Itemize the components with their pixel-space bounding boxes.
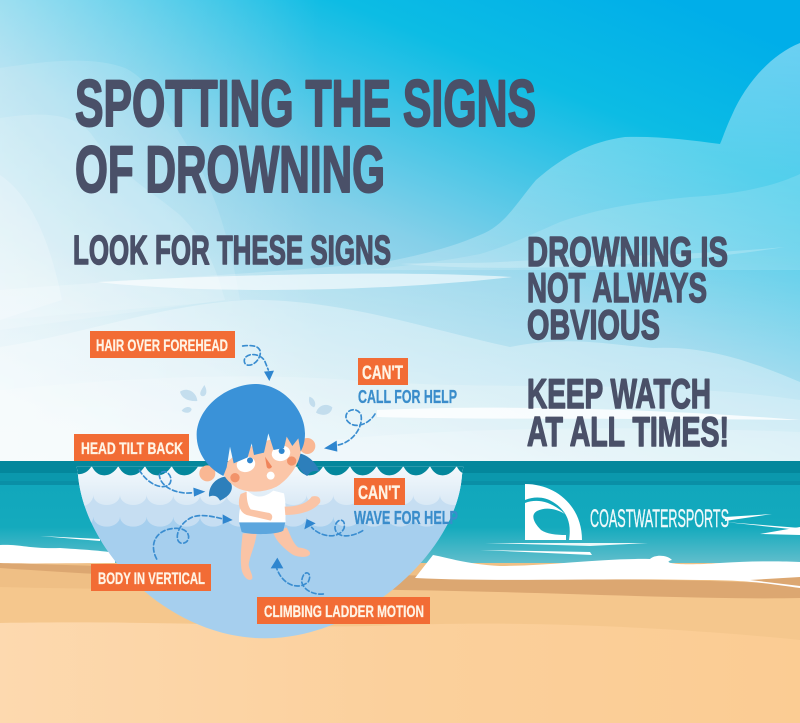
label: body in vertical: BODY IN VERTICAL [98,569,205,588]
icon: wave logo [525,484,582,540]
label: climbing ladder motion [257,597,430,624]
message: drowning is not always obvious: NOT ALWAYS [527,264,707,311]
sea [0,461,800,571]
clouds [0,43,800,470]
nose and mouth [265,457,275,480]
label: hair over forehead: HAIR OVER FOREHEAD [96,336,228,355]
cheeks [230,456,296,482]
label: climbing ladder motion: CLIMBING LADDER MOTION [264,602,424,621]
arrow: call for help [324,410,375,452]
arrow: head tilt back [139,470,205,497]
message: drowning is not always obvious: OBVIOUS [527,301,660,348]
water bowl [60,462,467,640]
label: can't call for help: CALL FOR HELP [358,387,457,407]
sand patch on foam [750,577,800,586]
logo: coastwatersports [525,484,729,540]
label: head tilt back: HEAD TILT BACK [81,439,184,458]
message: keep watch: KEEP WATCH [527,370,711,417]
sky background [0,0,800,470]
message: keep watch [527,370,729,455]
label: head tilt back [74,434,189,461]
shorts [239,522,285,534]
eyes [235,444,292,474]
water splashes [180,385,332,415]
label: can't wave for help: CAN'T [358,483,400,504]
shirt [239,491,286,522]
hair [197,384,305,476]
arms [239,492,320,521]
arrow: hair over forehead [243,346,274,381]
beach sand [0,563,800,723]
subheading: look for these signs: LOOK FOR THESE SIGNS [73,227,391,273]
legs [241,527,310,580]
sea foam [0,514,800,588]
label: can't wave for help [354,478,458,528]
arrow: wave for help [304,519,363,536]
label: can't call for help [358,358,457,407]
title: SPOTTING THE SIGNS [75,66,536,140]
pigtails [209,453,319,501]
title: OF DROWNING [75,132,385,206]
arrow: climbing ladder motion [271,558,323,594]
ears [199,438,315,481]
label: can't call for help: CAN'T [362,363,403,384]
arrow: body in vertical [153,514,233,559]
face [223,436,301,492]
message: drowning is not always obvious [527,228,728,348]
label: body in vertical [91,564,211,591]
label: can't wave for help: WAVE FOR HELP [354,508,458,528]
illustration: drowning child in water [60,346,467,640]
label: hair over forehead [90,331,235,358]
title [75,66,536,206]
